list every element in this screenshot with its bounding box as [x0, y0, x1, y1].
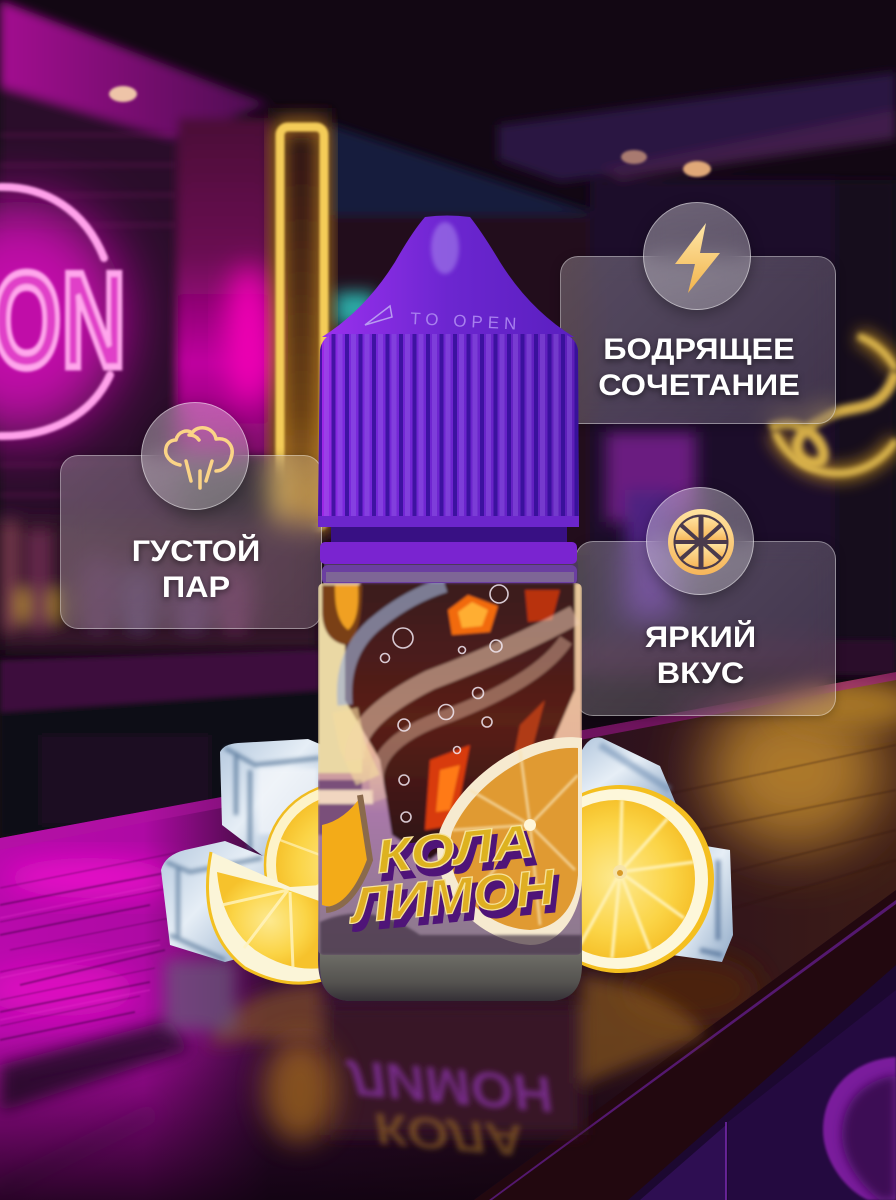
product: bottle with lemons and ice: [161, 216, 733, 1001]
bottle cap cone: [322, 216, 574, 337]
lemon: back half behind bottle: [264, 786, 320, 887]
product name: кола лимон: КОЛА: [374, 814, 536, 883]
neon: yellow round sign: [770, 336, 896, 473]
ceiling lamps: [109, 86, 711, 177]
counter front with purple panels and stool: [628, 965, 896, 1200]
bubbles: [380, 585, 508, 822]
bar shelf: [0, 640, 896, 838]
product name: кола лимон: КОЛА: [378, 821, 540, 890]
icon: citrus slice: [646, 487, 754, 595]
panel: густой пар: [60, 455, 322, 629]
text: бодрящее сочетание: БОДРЯЩЕЕ: [603, 333, 795, 366]
cap ring: [320, 542, 577, 564]
cap engraving: to open: [365, 306, 522, 334]
bottle and lemon reflection on counter: ЛИМОН: [342, 1049, 555, 1123]
brick wall texture glow: [0, 135, 175, 495]
icon: lightning bolt: [643, 202, 751, 310]
neon: yellow vertical rectangle: [278, 126, 324, 528]
ice cube: left front: [161, 841, 270, 962]
lemon: right slice: [526, 785, 714, 973]
lemon wedge on label: [322, 800, 367, 906]
shelf bottles: [0, 520, 320, 650]
text: яркий вкус: ЯРКИЙ: [645, 621, 756, 654]
bar counter: [0, 672, 896, 1200]
neon glow on brick wall: [0, 200, 125, 436]
bottle and lemon reflection on counter: КОЛА: [372, 1103, 525, 1165]
neon sign: ION circle: [0, 187, 126, 436]
text: густой пар: ПАР: [162, 570, 230, 604]
text: бодрящее сочетание: [597, 333, 800, 402]
surface wood grain: [0, 851, 180, 1042]
lemon half on label: [437, 737, 582, 945]
bottle and lemon reflection on counter: [165, 960, 705, 1165]
text: густой пар: [130, 534, 262, 604]
product name: кола лимон: [345, 814, 562, 941]
bottle base glass: [320, 940, 582, 1001]
cap engraving: to open: TO OPEN: [410, 309, 522, 334]
label art: [318, 583, 582, 955]
ice cube: right back: [582, 738, 676, 804]
bottle: [318, 216, 582, 1001]
text: бодрящее сочетание: СОЧЕТАНИЕ: [598, 368, 800, 402]
panel: яркий вкус: [575, 541, 836, 716]
product name: кола лимон: ЛИМОН: [345, 859, 558, 934]
counter colored reflections: [5, 858, 175, 898]
cap lip: [318, 516, 579, 527]
magenta glow on pillar: [226, 265, 270, 405]
panel: бодрящее сочетание: [560, 256, 836, 424]
ice cube: left back: [220, 739, 322, 860]
product name: кола лимон: ЛИМОН: [349, 866, 562, 941]
text: густой пар: ГУСТОЙ: [132, 535, 260, 568]
back wall and ceiling: [0, 0, 896, 660]
ice cube: right front: [672, 845, 733, 962]
text: яркий вкус: [644, 620, 757, 690]
text: яркий вкус: ВКУС: [657, 656, 744, 690]
bottle cap ribbed: [318, 334, 579, 527]
lemon: front wedge: [207, 852, 322, 983]
icon: vapor cloud: [141, 402, 249, 510]
bottle neck and shoulder glass: [318, 558, 582, 1001]
label bottom shade: [320, 914, 582, 955]
